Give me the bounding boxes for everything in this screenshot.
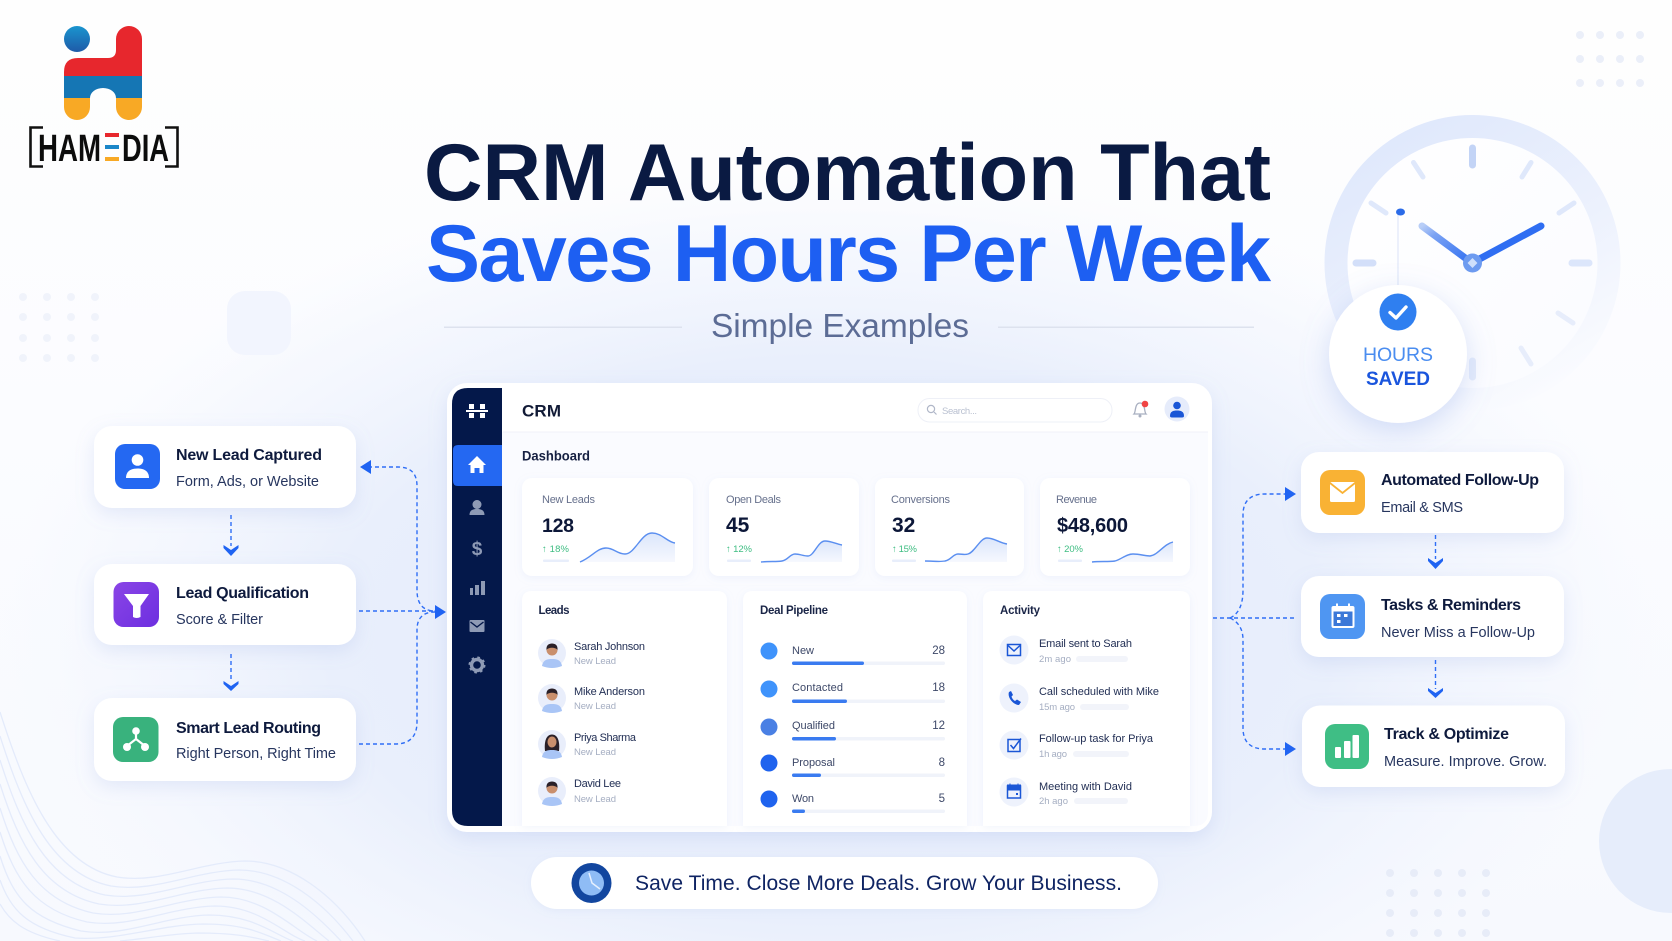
- icon: user avatar: [1164, 396, 1190, 422]
- pipeline: new: New: [792, 645, 814, 657]
- stat card: revenue: Revenue: [1056, 494, 1097, 506]
- hours label: HOURS: [1363, 344, 1433, 366]
- activity: email: Email sent to Sarah: [1039, 638, 1132, 650]
- decorative dots: left: [19, 293, 99, 362]
- arrow: captured to qualification: [224, 515, 238, 556]
- pipeline: contacted: Contacted: [792, 682, 843, 694]
- activity: task: [1000, 730, 1154, 760]
- check icon: [1380, 294, 1416, 330]
- stat card: new leads: New Leads: [542, 494, 596, 506]
- stat card: new leads: ↑ 18%: [542, 544, 570, 555]
- card: track and optimize: Track & Optimize: [1384, 726, 1509, 743]
- stat card: open deals: [709, 478, 859, 576]
- pipeline: new: [760, 642, 945, 665]
- lead: David Lee: David Lee: [574, 778, 621, 790]
- decorative wave lines: [0, 712, 365, 941]
- activity: email: [1000, 636, 1132, 665]
- clock hub: [1463, 254, 1482, 272]
- saved label: SAVED: [1366, 369, 1430, 390]
- panel: leads: Leads: [538, 605, 570, 617]
- lead: Mike Anderson: Mike Anderson: [574, 686, 645, 698]
- sidebar logo icon: [466, 404, 488, 418]
- pipeline: won: [760, 790, 945, 813]
- panel: deal pipeline: [743, 591, 967, 826]
- stat card: revenue: ↑ 20%: [1057, 544, 1084, 555]
- lead: Mike Anderson: New Lead: [574, 701, 616, 712]
- icon: person: [470, 500, 484, 515]
- card: automated follow-up: [1301, 452, 1564, 533]
- card: smart lead routing: Smart Lead Routing: [176, 720, 321, 737]
- activity: email: 2m ago: [1039, 654, 1071, 665]
- card: lead qualification: Score & Filter: [176, 612, 263, 628]
- activity: meeting: 2h ago: [1039, 796, 1068, 807]
- arrow: qualification to routing: [224, 654, 238, 691]
- active home item: [453, 445, 502, 486]
- lead: Priya Sharma: [538, 730, 637, 759]
- arrow: follow-up to tasks: [1428, 535, 1443, 569]
- stat card: open deals: ↑ 12%: [726, 544, 753, 555]
- clock illustration: [1336, 126, 1609, 400]
- tagline text: Save Time. Close More Deals. Grow Your Business.: [635, 872, 1122, 895]
- logo wordmark right: DIA: [122, 128, 169, 170]
- panel: CRM dashboard: [447, 383, 1212, 832]
- header: [503, 396, 1208, 432]
- activity: call: 15m ago: [1039, 702, 1075, 713]
- logo brackets: [30, 128, 178, 166]
- icon: bar chart: [1325, 724, 1369, 769]
- logo blue band: [64, 76, 142, 98]
- badge: hours saved: [1329, 285, 1467, 423]
- pipeline: won: Won: [792, 793, 814, 805]
- lead: Mike Anderson: [538, 684, 645, 713]
- card: automated follow-up: Automated Follow-Up: [1381, 472, 1539, 489]
- card: new lead captured: Form, Ads, or Website: [176, 474, 319, 490]
- icon: gear: [470, 658, 484, 672]
- icon: envelope: [1320, 470, 1365, 515]
- icon: home: [468, 456, 486, 473]
- dashboard heading: Dashboard: [522, 448, 590, 464]
- stat card: conversions: ↑ 15%: [892, 544, 918, 555]
- icon: mail: [470, 620, 484, 632]
- icon: routing: [113, 717, 158, 762]
- decorative dots: top right: [1576, 31, 1644, 87]
- card: automated follow-up: Email & SMS: [1381, 500, 1463, 516]
- logo wordmark left: HAM: [38, 128, 101, 170]
- pipeline: proposal: 8: [939, 757, 945, 769]
- pipeline: qualified: Qualified: [792, 720, 835, 732]
- icon: person: [115, 444, 160, 489]
- arrow: tasks to track: [1428, 660, 1443, 698]
- icon: funnel: [114, 582, 159, 627]
- icon: clock badge: [572, 863, 612, 903]
- callout: bottom tagline: [531, 857, 1158, 909]
- icon: bell: [1134, 401, 1148, 418]
- icon: dollar: $: [472, 539, 483, 560]
- subtitle: Simple Examples: [711, 308, 969, 345]
- activity: task: 1h ago: [1039, 749, 1067, 760]
- logo E bars: [105, 133, 119, 161]
- card: new lead captured: New Lead Captured: [176, 447, 322, 464]
- icon: chart: [470, 581, 485, 595]
- search box: Search...: [942, 406, 977, 417]
- stat card: revenue: $48,600: [1057, 515, 1128, 537]
- decorative rounded square: [227, 291, 291, 355]
- pipeline: contacted: [760, 680, 945, 703]
- pipeline: qualified: 12: [932, 720, 945, 732]
- card: tasks and reminders: Tasks & Reminders: [1381, 597, 1521, 614]
- sidebar: [452, 388, 502, 826]
- stat card: revenue: [1040, 478, 1190, 576]
- lead: David Lee: [538, 777, 621, 806]
- clock ticks: [1356, 148, 1589, 377]
- panel: activity: [983, 591, 1190, 826]
- lead: Sarah Johnson: New Lead: [574, 656, 616, 667]
- card: lead qualification: Lead Qualification: [176, 585, 309, 602]
- card: tasks and reminders: Never Miss a Follow-Up: [1381, 625, 1535, 641]
- card: track and optimize: Measure. Improve. Grow.: [1384, 754, 1547, 770]
- arrows: dashboard to right cards: [1213, 487, 1296, 756]
- activity: meeting: [1000, 778, 1132, 807]
- card: smart lead routing: [94, 698, 356, 781]
- logo dot: [64, 26, 90, 52]
- icon: calendar: [1320, 594, 1365, 639]
- pipeline: won: 5: [939, 793, 945, 805]
- dashboard content area: [502, 432, 1208, 826]
- clock ring: [1336, 126, 1609, 400]
- card: tasks and reminders: [1301, 576, 1564, 657]
- decorative circle bottom right: [1599, 769, 1672, 913]
- logo orange legs: [64, 98, 142, 120]
- stat card: conversions: 32: [892, 514, 915, 537]
- search box: [918, 398, 1112, 422]
- panel: activity: Activity: [1000, 605, 1041, 617]
- lead: Priya Sharma: Priya Sharma: [574, 732, 637, 744]
- logo red band: [64, 26, 142, 76]
- logo: Hamedia: [30, 26, 178, 170]
- pipeline: contacted: 18: [932, 682, 945, 694]
- stat card: conversions: Conversions: [891, 494, 950, 506]
- activity: task: Follow-up task for Priya: [1039, 733, 1154, 745]
- activity: call: [1000, 684, 1159, 713]
- panel: leads: [522, 591, 727, 826]
- dashboard card: [447, 383, 1212, 832]
- lead: David Lee: New Lead: [574, 794, 616, 805]
- stat card: conversions: [875, 478, 1024, 576]
- panel: deal pipeline: Deal Pipeline: [760, 605, 828, 617]
- card: lead qualification: [94, 564, 356, 645]
- activity: call: Call scheduled with Mike: [1039, 686, 1159, 698]
- title line 2: Saves Hours Per Week: [426, 209, 1272, 299]
- pipeline: proposal: Proposal: [792, 757, 835, 769]
- title: [424, 128, 1272, 299]
- card: new lead captured: [94, 426, 356, 508]
- stat card: new leads: 128: [542, 515, 574, 537]
- stat card: new leads: [522, 478, 693, 576]
- decorative dots: bottom right: [1386, 869, 1490, 937]
- minute hand: [1472, 226, 1541, 263]
- pipeline: proposal: [760, 754, 945, 777]
- clock second pointer: [1396, 208, 1405, 290]
- lead: Priya Sharma: New Lead: [574, 747, 616, 758]
- arrows: left cards to dashboard: [359, 460, 446, 744]
- card: smart lead routing: Right Person, Right Time: [176, 746, 336, 762]
- pipeline: qualified: [760, 718, 945, 740]
- title line 1: CRM Automation That: [424, 128, 1271, 218]
- hour hand: [1422, 226, 1472, 263]
- activity: meeting: Meeting with David: [1039, 781, 1132, 793]
- lead: Sarah Johnson: Sarah Johnson: [574, 641, 645, 653]
- CRM label: CRM: [522, 402, 561, 420]
- header divider: [503, 432, 1208, 433]
- stat card: open deals: Open Deals: [726, 494, 782, 506]
- pipeline: new: 28: [932, 645, 945, 657]
- lead: Sarah Johnson: [538, 639, 645, 668]
- stat card: open deals: 45: [726, 514, 750, 537]
- card: track and optimize: [1302, 706, 1565, 787]
